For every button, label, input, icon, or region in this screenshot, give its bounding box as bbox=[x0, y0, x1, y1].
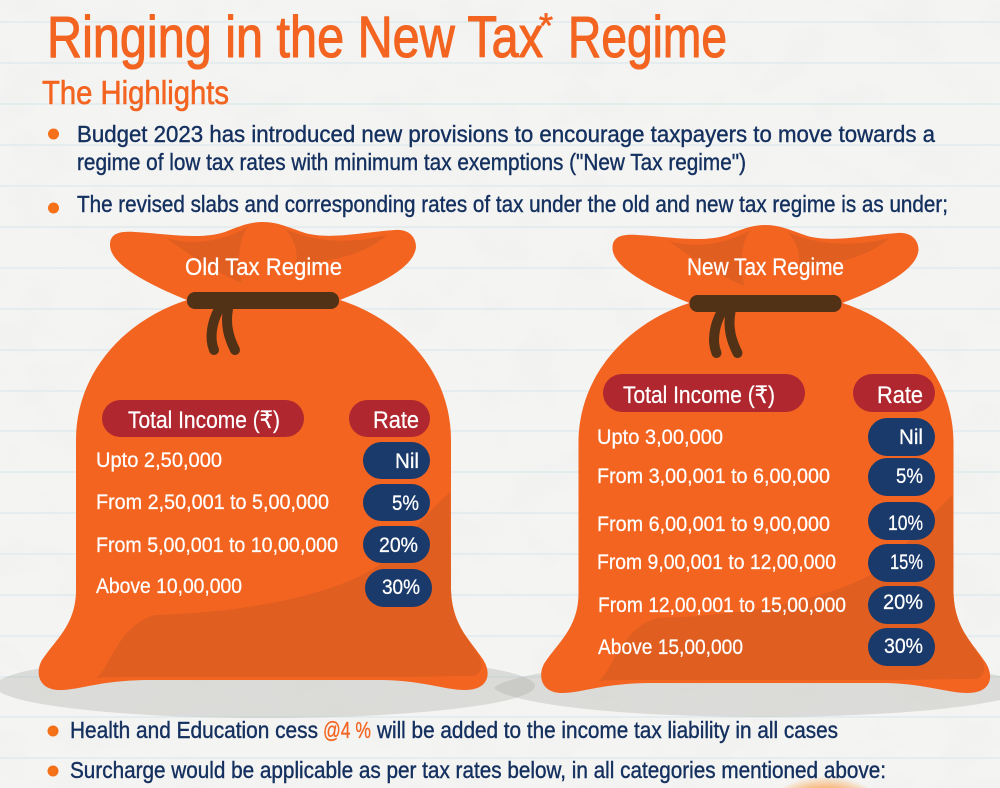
title: Regime bbox=[568, 5, 727, 70]
row: 3,00,001 to 6,00,000 bbox=[597, 458, 935, 496]
note bullet: health and education cess bbox=[48, 717, 838, 743]
bag illustration: new regime bbox=[541, 225, 990, 693]
row: 12,00,001 to 15,00,000: 20% bbox=[883, 591, 923, 614]
row: above 15,00,000: 30% bbox=[884, 635, 923, 658]
header: rate bbox=[349, 400, 430, 437]
header: total income bbox=[603, 374, 805, 412]
row: above 10,00,000 bbox=[96, 569, 432, 607]
note bullet: health and education cess: Health and Education cess bbox=[70, 717, 318, 743]
row: 5,00,001 to 10,00,000 bbox=[96, 526, 430, 563]
row: upto 2,50,000: Upto 2,50,000 bbox=[96, 449, 222, 472]
row: 3,00,001 to 6,00,000: 5% bbox=[896, 465, 923, 488]
row: 2,50,001 to 5,00,000 bbox=[96, 484, 430, 521]
intro bullet 1: regime of low tax rates with minimum tax exemptions ("New Tax regime") bbox=[77, 149, 746, 175]
header: total income bbox=[102, 400, 304, 437]
row: 6,00,001 to 9,00,000: 10% bbox=[888, 512, 923, 535]
header: total income: Total Income (₹) bbox=[128, 407, 280, 434]
row: 12,00,001 to 15,00,000 bbox=[598, 586, 935, 624]
row: upto 3,00,000 bbox=[597, 418, 935, 456]
row: 5,00,001 to 10,00,000: 20% bbox=[379, 534, 418, 557]
bag label: old tax regime: Old Tax Regime bbox=[185, 254, 342, 281]
header: total income: Total Income (₹) bbox=[623, 382, 775, 409]
intro bullet 1: Budget 2023 has introduced new provisions to encourage taxpayers to move towards a bbox=[77, 121, 935, 147]
row: 9,00,001 to 12,00,000: 15% bbox=[890, 551, 923, 574]
row: 6,00,001 to 9,00,000 bbox=[597, 502, 935, 540]
note bullet: surcharge: Surcharge would be applicable as per tax rates below, in all categories mentioned above: bbox=[70, 757, 886, 783]
note bullet: health and education cess: @4 % bbox=[323, 717, 371, 743]
row: upto 2,50,000 bbox=[96, 442, 430, 479]
row: 9,00,001 to 12,00,000: From 9,00,001 to 12,00,000 bbox=[597, 551, 836, 574]
header: rate: Rate bbox=[877, 382, 923, 409]
row: above 10,00,000: 30% bbox=[382, 576, 420, 599]
bag label: new tax regime: New Tax Regime bbox=[687, 254, 844, 281]
note bullet: health and education cess: will be added to the income tax liability in all cases bbox=[376, 717, 838, 743]
row: upto 3,00,000: Upto 3,00,000 bbox=[597, 426, 723, 449]
row: upto 3,00,000: Nil bbox=[899, 426, 923, 449]
row: 2,50,001 to 5,00,000: From 2,50,001 to 5,00,000 bbox=[96, 491, 329, 514]
panel: new tax regime bag bbox=[541, 225, 990, 693]
row: 6,00,001 to 9,00,000: From 6,00,001 to 9,00,000 bbox=[597, 513, 830, 536]
header: rate bbox=[853, 374, 935, 412]
row: above 10,00,000: Above 10,00,000 bbox=[96, 575, 242, 598]
row: upto 2,50,000: Nil bbox=[395, 450, 419, 473]
bag illustration: old regime bbox=[39, 222, 488, 690]
orange glow at bottom edge bbox=[753, 776, 897, 788]
title: * bbox=[539, 7, 553, 45]
row: 5,00,001 to 10,00,000: From 5,00,001 to 10,00,000 bbox=[96, 534, 338, 557]
title: Ringing in the New Tax bbox=[47, 5, 543, 70]
row: 9,00,001 to 12,00,000 bbox=[597, 544, 935, 582]
row: 2,50,001 to 5,00,000: 5% bbox=[392, 492, 419, 515]
row: above 15,00,000 bbox=[598, 628, 935, 666]
header: rate: Rate bbox=[373, 407, 419, 434]
intro bullet 1 bbox=[48, 121, 935, 175]
heading: the highlights: The Highlights bbox=[42, 74, 229, 111]
row: 12,00,001 to 15,00,000: From 12,00,001 to 15,00,000 bbox=[598, 594, 846, 617]
row: above 15,00,000: Above 15,00,000 bbox=[598, 636, 743, 659]
row: 3,00,001 to 6,00,000: From 3,00,001 to 6,00,000 bbox=[597, 465, 830, 488]
bag shadows bbox=[0, 654, 1000, 718]
panel: old tax regime bag bbox=[39, 222, 488, 690]
